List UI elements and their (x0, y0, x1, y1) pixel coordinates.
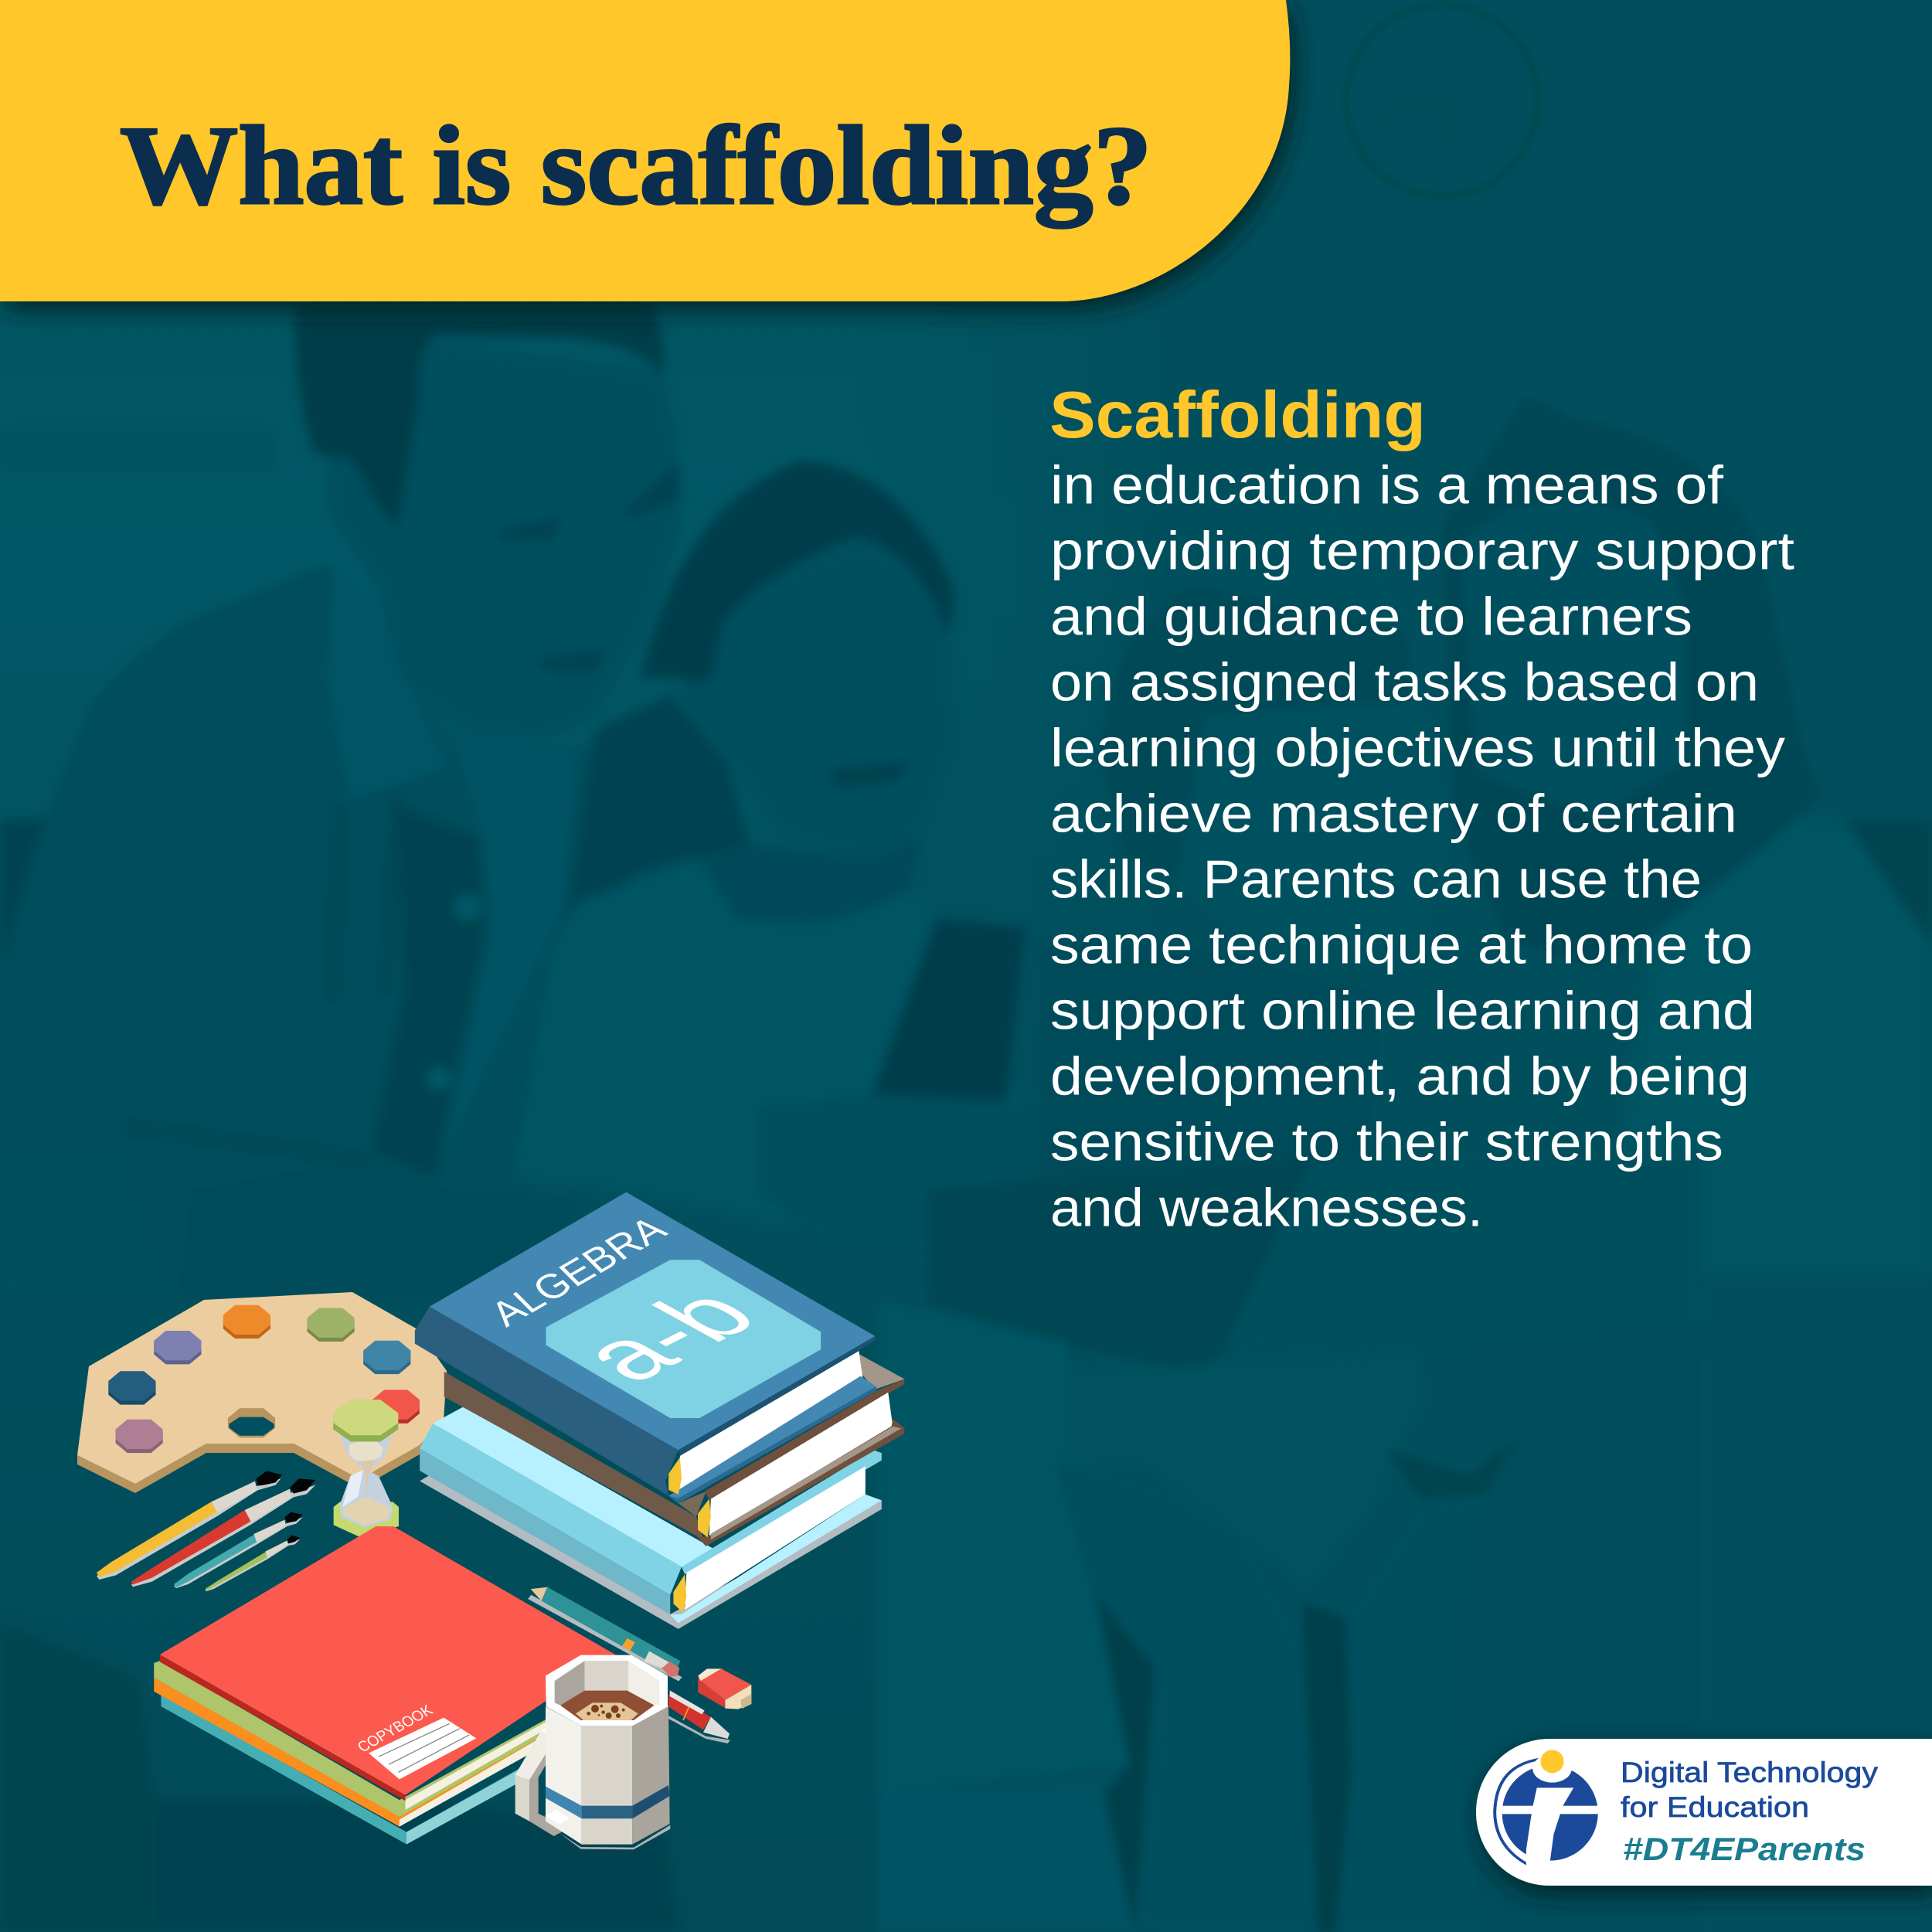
body paragraph: providing temporary support (1050, 521, 1794, 581)
copybook label text: COPYBOOK (355, 1702, 437, 1756)
yellow banner shape (0, 0, 1290, 301)
icon: pen (668, 1690, 730, 1743)
logo text: #DT4EParents (1623, 1831, 1866, 1867)
icon: eraser (698, 1668, 751, 1709)
lower left clothing silhouettes (0, 1623, 680, 1932)
body paragraph (1050, 454, 1794, 1238)
lower family body silhouettes (878, 1159, 1700, 1932)
wall clock (1346, 5, 1538, 196)
red brush (131, 1478, 315, 1587)
body paragraph: development, and by being (1050, 1046, 1750, 1107)
body paragraph: learning objectives until they (1050, 717, 1785, 777)
heading: Scaffolding: Scaffolding (1049, 379, 1426, 452)
white pill (1476, 1739, 1932, 1886)
icon: paint brushes (97, 1471, 315, 1591)
body paragraph: sensitive to their strengths (1050, 1111, 1723, 1172)
body paragraph: skills. Parents can use the (1050, 849, 1702, 909)
book title: ALGEBRA: ALGEBRA (481, 1209, 675, 1334)
logo text: Digital Technology (1621, 1757, 1879, 1788)
DT4E logo mark (1495, 1750, 1600, 1866)
middle brown book (444, 1354, 904, 1546)
body paragraph: and weaknesses. (1050, 1178, 1483, 1238)
body paragraph: achieve mastery of certain (1050, 784, 1737, 844)
isometric study illustration (77, 1192, 904, 1849)
bottom light blue book (420, 1406, 882, 1629)
icon: coffee mug (515, 1655, 670, 1849)
copybook stack (154, 1526, 615, 1845)
title: What is scaffolding? (120, 103, 1152, 228)
green brush (206, 1536, 300, 1591)
teal brush (174, 1512, 303, 1588)
definition text block (1049, 379, 1794, 1238)
logo badge: Digital Technology for Education (1476, 1739, 1932, 1886)
cover label panel (546, 1260, 821, 1418)
book stack: algebra textbooks (415, 1192, 904, 1629)
top blue book (415, 1192, 876, 1503)
body paragraph: in education is a means of (1050, 454, 1724, 515)
mother and child silhouettes (1040, 395, 1932, 1275)
body paragraph: and guidance to learners (1050, 586, 1692, 646)
icon: hourglass (333, 1400, 399, 1537)
mug body (545, 1706, 670, 1845)
icon: pencil (529, 1587, 680, 1679)
mug handle (515, 1721, 570, 1836)
logo text (1621, 1757, 1879, 1867)
book label: a-b: a-b (551, 1274, 783, 1396)
body paragraph: support online learning and (1050, 980, 1755, 1040)
father and daughter silhouettes (0, 303, 1121, 1298)
mug rim and coffee (546, 1655, 668, 1726)
body paragraph: same technique at home to (1050, 915, 1753, 975)
logo text: for Education (1621, 1791, 1809, 1823)
title banner (0, 0, 1290, 301)
yellow brush (97, 1471, 282, 1580)
icon: paint palette (77, 1292, 447, 1493)
body paragraph: on assigned tasks based on (1050, 652, 1759, 713)
